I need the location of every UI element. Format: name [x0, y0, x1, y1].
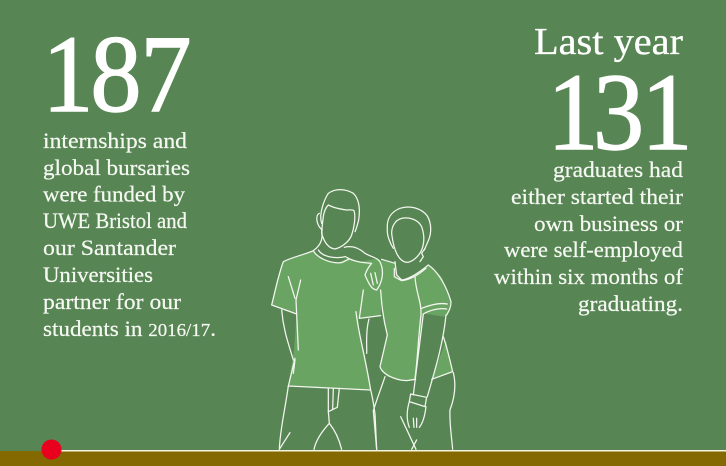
left text block: partner for our — [43, 289, 182, 314]
right text block: graduates had — [553, 157, 683, 182]
right text block — [494, 157, 684, 316]
ground bar — [0, 450, 726, 466]
student on the right — [373, 207, 455, 449]
left text block: global bursaries — [43, 155, 190, 180]
left big number: 187: 187 — [42, 13, 191, 135]
left text block: internships and — [43, 128, 187, 153]
left text block — [43, 128, 216, 341]
left text block: UWE Bristol and — [43, 208, 187, 233]
right text block: were self-employed — [504, 237, 683, 262]
right text block: within six months of — [494, 264, 684, 289]
illustration: two students — [272, 190, 455, 449]
right big number: 131: 131 — [547, 51, 693, 173]
left text block: Universities — [43, 262, 153, 287]
left text block: were funded by — [43, 182, 185, 206]
right heading: Last year: Last year — [534, 21, 683, 63]
right text block: either started their — [511, 184, 684, 209]
left text block: our Santander — [43, 235, 177, 260]
student on the left — [272, 190, 387, 449]
right text block: own business or — [534, 211, 684, 236]
left text block: students in 2016/17. — [43, 316, 216, 341]
red dot marker — [42, 440, 62, 460]
right text block: graduating. — [578, 291, 683, 316]
